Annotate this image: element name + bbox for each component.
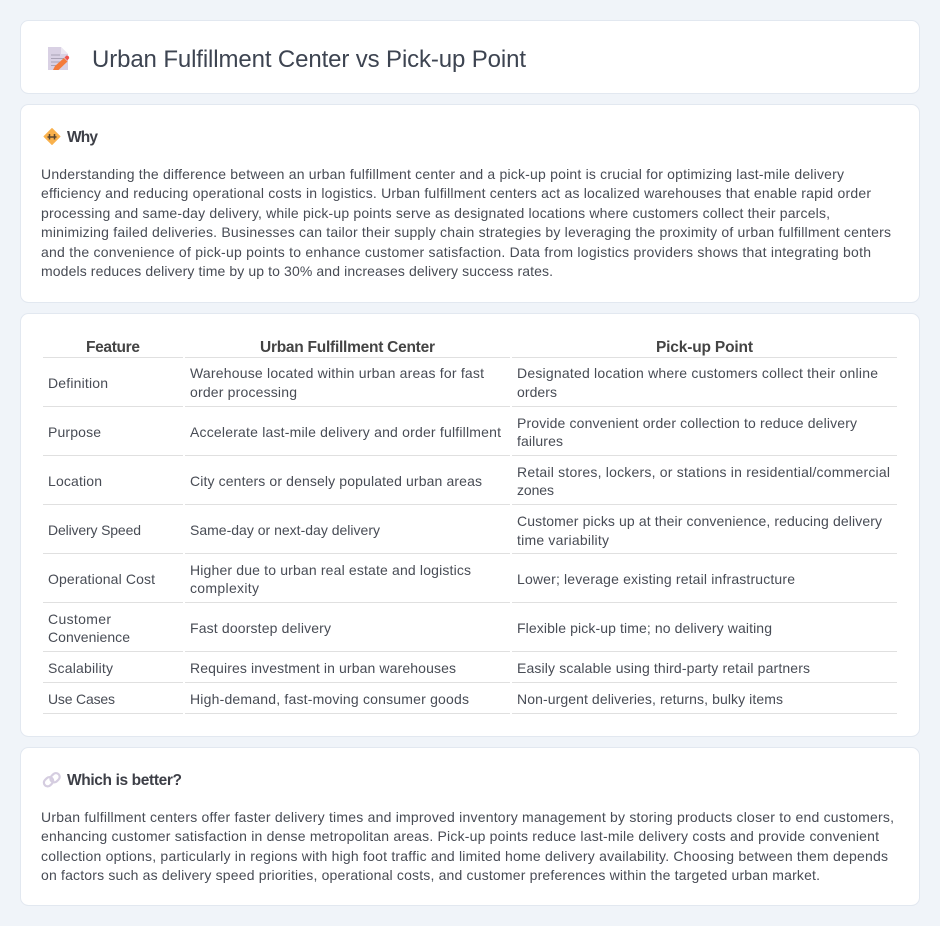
table row: delivery speed: Same-day or next-day delivery [190, 522, 380, 538]
text block: which is better paragraph: enhancing customer satisfaction in dense metropolitan areas. Pick-up points reduce last-mile delivery costs and provide convenient [41, 828, 879, 844]
table row: delivery speed: time variability [517, 532, 609, 548]
table row: purpose: Accelerate last-mile delivery and order fulfillment [190, 424, 501, 440]
text block: which is better paragraph [41, 809, 894, 883]
table row: delivery speed [43, 513, 897, 554]
text block: which is better paragraph: on factors such as delivery speed priorities, operational costs, and customer preferences within the targeted urban market. [41, 867, 820, 883]
panel: header [20, 20, 920, 94]
table header row: Urban Fulfillment Center [260, 339, 435, 356]
table row: purpose: Provide convenient order collection to reduce delivery [517, 415, 857, 431]
text block: why paragraph: processing and same-day delivery, while pick-up points serve as designated locations where customers collect their parcels, [41, 205, 830, 221]
table header row [43, 339, 897, 358]
table row: definition: orders [517, 384, 557, 400]
panel: comparison table [20, 314, 920, 736]
table row: use cases: Non-urgent deliveries, returns, bulky items [517, 691, 783, 707]
table row: purpose: Purpose [48, 424, 101, 440]
title: Urban Fulfillment Center vs Pick-up Point [92, 46, 526, 73]
heading: which is better: Which is better? [67, 772, 182, 789]
table row: scalability: Easily scalable using third-party retail partners [517, 660, 810, 676]
table row: customer convenience: Convenience [48, 629, 130, 645]
text block: why paragraph: Understanding the difference between an urban fulfillment center and a pick-up point is crucial for optimizing last-mile delivery [41, 166, 844, 182]
table row: purpose: failures [517, 433, 563, 449]
table row: scalability: Requires investment in urban warehouses [190, 660, 456, 676]
icon: warning diamond [44, 128, 60, 144]
table row: location [43, 464, 897, 505]
heading: why: Why [67, 129, 98, 146]
table row: scalability: Scalability [48, 660, 113, 676]
table row: use cases [43, 691, 897, 714]
table row: customer convenience [43, 611, 897, 652]
table row: location: Location [48, 473, 102, 489]
table row: scalability [43, 660, 897, 683]
table row: customer convenience: Customer [48, 611, 111, 627]
text block: why paragraph: and the convenience of pick-up points to enhance customer satisfaction. Data from logistics providers shows that integrating both [41, 244, 871, 260]
table header row: Pick-up Point [656, 339, 753, 356]
table row: definition: order processing [190, 384, 297, 400]
table row: operational cost: Lower; leverage existing retail infrastructure [517, 571, 795, 587]
table row: operational cost [43, 562, 897, 603]
text block: why paragraph: minimizing failed deliveries. Businesses can tailor their supply chain strategies by leveraging the proximity of urban fulfillment centers [41, 224, 891, 240]
table row: customer convenience: Fast doorstep delivery [190, 620, 331, 636]
panel: why [20, 104, 920, 302]
text block: why paragraph: models reduces delivery time by up to 30% and increases delivery success rates. [41, 263, 553, 279]
table row: definition: Definition [48, 375, 108, 391]
table row: operational cost: complexity [190, 580, 259, 596]
panel: which is better [20, 748, 920, 906]
table row: delivery speed: Customer picks up at their convenience, reducing delivery [517, 513, 882, 529]
table row: definition: Warehouse located within urban areas for fast [190, 365, 484, 381]
table row: operational cost: Operational Cost [48, 571, 155, 587]
table row: operational cost: Higher due to urban real estate and logistics [190, 562, 471, 578]
text block: which is better paragraph: Urban fulfillment centers offer faster delivery times and improved inventory management by storing products closer to end customers, [41, 809, 894, 825]
table row: use cases: High-demand, fast-moving consumer goods [190, 691, 469, 707]
table row: delivery speed: Delivery Speed [48, 522, 141, 538]
text block: why paragraph [41, 166, 891, 279]
table row: location: City centers or densely populated urban areas [190, 473, 482, 489]
table row: definition [43, 365, 897, 407]
text block: which is better paragraph: collection options, particularly in regions with high foot traffic and limited home delivery availability. Choosing between them depends [41, 848, 888, 864]
text block: why paragraph: efficiency and reducing operational costs in logistics. Urban fulfillment centers act as localized warehouses that enable rapid order [41, 185, 871, 201]
icon: document with pencil [48, 47, 69, 70]
table row: location: zones [517, 482, 554, 498]
table row: purpose [43, 415, 897, 456]
table row: location: Retail stores, lockers, or stations in residential/commercial [517, 464, 890, 480]
icon: link [42, 772, 61, 788]
table row: definition: Designated location where customers collect their online [517, 365, 878, 381]
table header row: Feature [86, 339, 140, 356]
table row: customer convenience: Flexible pick-up time; no delivery waiting [517, 620, 772, 636]
table row: use cases: Use Cases [48, 691, 115, 707]
